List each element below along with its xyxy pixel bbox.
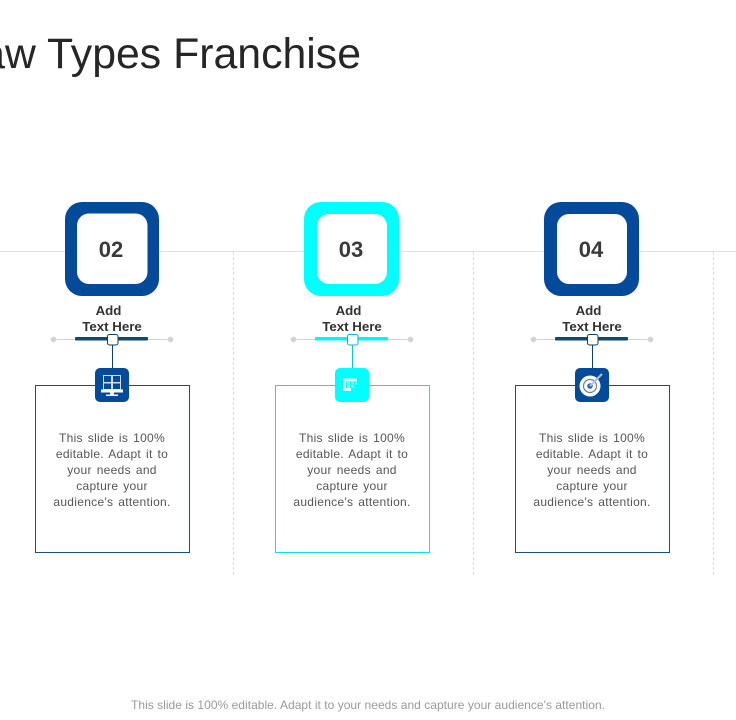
text box 04: capture your (556, 479, 628, 493)
number badge 03: 03 (339, 237, 363, 262)
text box 04: editable. Adapt it to (536, 447, 648, 461)
text box 03: editable. Adapt it to (296, 447, 408, 461)
icon: target with arrow 04 (575, 368, 609, 402)
slider 03 (291, 334, 413, 345)
text box 03: audience's attention. (293, 495, 411, 509)
number badge 04: 04 (579, 237, 604, 262)
text box 02: audience's attention. (53, 495, 171, 509)
connector 02 (112, 345, 114, 368)
number badge 02 (65, 202, 159, 296)
panel: step 03 (276, 202, 430, 552)
heading 04: Add (576, 303, 601, 318)
connector 04 (592, 345, 594, 368)
panel: step 04 (516, 202, 670, 552)
text box 04 (516, 386, 670, 552)
text box 02: your needs and (67, 463, 157, 477)
text box 03 (276, 386, 430, 552)
slider 04 (531, 334, 653, 345)
number badge 02: 02 (99, 237, 123, 262)
text box 02: This slide is 100% (59, 431, 165, 445)
connector 03 (352, 345, 354, 368)
number badge 04 (544, 202, 639, 296)
heading 02: Text Here (82, 319, 142, 334)
text box 04: This slide is 100% (539, 431, 645, 445)
heading 04: Text Here (562, 319, 622, 334)
icon: calendar 03 (335, 368, 369, 402)
text box 04: audience's attention. (533, 495, 651, 509)
panel: step 02 (36, 202, 190, 552)
heading 02: Add (96, 303, 121, 318)
text box 04: your needs and (547, 463, 637, 477)
text box 02: capture your (76, 479, 148, 493)
heading 03: Add (336, 303, 361, 318)
slider 02 (51, 334, 173, 345)
text box 02: editable. Adapt it to (56, 447, 168, 461)
icon: monitor with books 02 (95, 368, 129, 402)
text box 03: This slide is 100% (299, 431, 405, 445)
text box 03: your needs and (307, 463, 397, 477)
heading 03: Text Here (322, 319, 382, 334)
number badge 03 (304, 202, 399, 296)
text box 02 (36, 386, 190, 552)
footer caption: This slide is 100% editable. Adapt it to your needs and capture your audience's attention. (131, 698, 605, 712)
text box 03: capture your (316, 479, 388, 493)
